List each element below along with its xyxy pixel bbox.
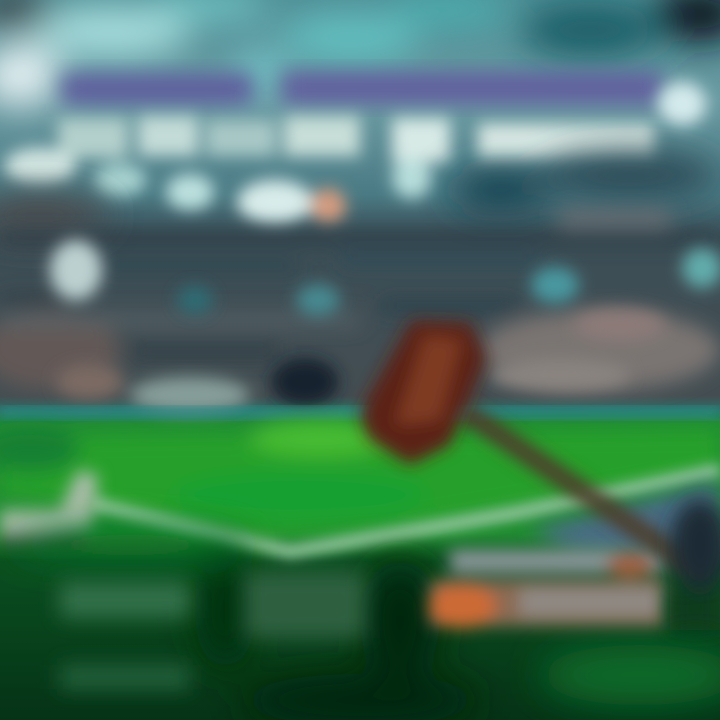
lower faint panels [60,572,365,689]
left white object [0,470,98,546]
gavel [360,320,690,565]
bright headline band [4,82,706,224]
lower dark pitch [10,531,720,720]
pitch [0,420,720,552]
stands [0,210,720,390]
gavel handle [470,415,690,565]
pitch lines [90,470,720,552]
purple banner [62,72,662,104]
teal pitch edge [0,408,720,418]
stands highlights [50,240,720,413]
dark teal mid patches [0,151,720,237]
book [428,550,665,628]
dark right corner [670,499,720,630]
stadium roof [0,0,720,105]
blue-grey right pitch area [530,480,720,560]
gavel head [360,320,486,465]
